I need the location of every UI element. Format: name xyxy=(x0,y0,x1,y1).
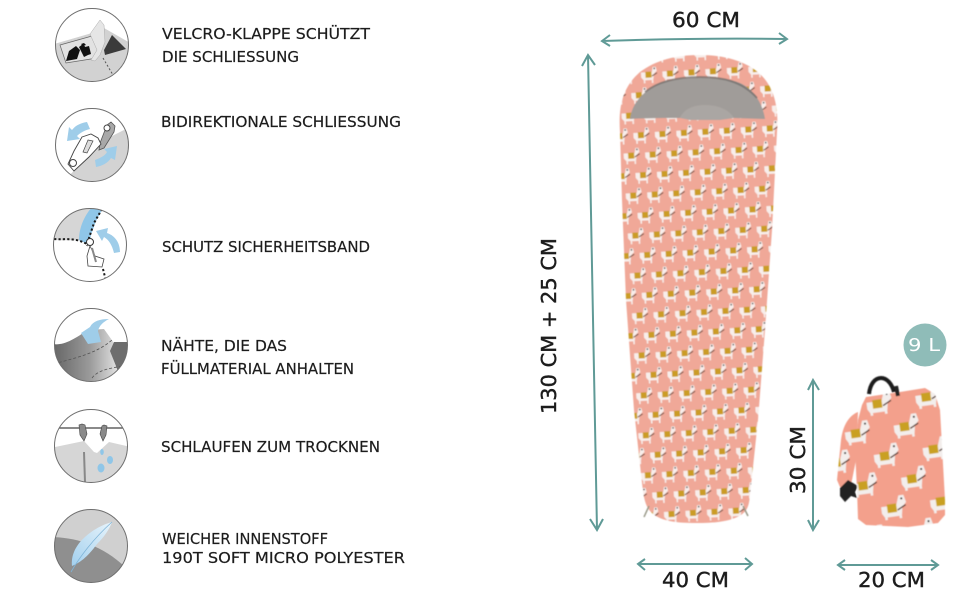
label: 30 cm: 30 CM xyxy=(786,426,810,494)
handle xyxy=(869,378,894,394)
badge: 9 L volume: 9 L xyxy=(908,335,940,356)
icon: seams xyxy=(54,308,128,382)
text: safety band: SCHUTZ SICHERHEITSBAND xyxy=(162,238,370,256)
arrow: backpack height xyxy=(808,380,819,530)
text: seams: FÜLLMATERIAL ANHALTEN xyxy=(161,359,354,378)
arrow: backpack width xyxy=(838,560,938,570)
text: soft inner fabric: 190T SOFT MICRO POLYESTER xyxy=(162,549,405,567)
icon: drying loops xyxy=(54,409,128,483)
text: velcro flap: DIE SCHLIESSUNG xyxy=(162,48,299,66)
sleeping bag xyxy=(620,55,777,523)
text: velcro flap xyxy=(162,24,371,66)
hood opening xyxy=(630,77,765,119)
label: 130 cm + 25 cm: 130 CM + 25 CM xyxy=(537,238,561,414)
hood shadow edge xyxy=(645,77,757,98)
icon: velcro flap xyxy=(55,8,129,82)
strap buckles xyxy=(840,480,858,502)
bag body xyxy=(855,388,945,527)
icon: safety band zipper xyxy=(53,208,127,282)
label: 60 cm: 60 CM xyxy=(672,8,740,32)
icon: bidirectional zipper xyxy=(55,108,129,182)
label: 40 cm: 40 CM xyxy=(662,568,729,592)
shoulder strap xyxy=(837,412,858,490)
arrow: foot width xyxy=(638,558,752,570)
text: velcro flap: VELCRO-KLAPPE SCHÜTZT xyxy=(162,24,371,43)
arrow: top width xyxy=(602,33,787,46)
drawstring xyxy=(896,386,898,396)
text: seams xyxy=(161,336,354,378)
compressed backpack xyxy=(837,378,945,527)
label: 20 cm: 20 CM xyxy=(858,568,925,592)
text: seams: NÄHTE, DIE DAS xyxy=(161,336,287,355)
text: drying loops: SCHLAUFEN ZUM TROCKNEN xyxy=(161,438,380,456)
text: soft inner fabric: WEICHER INNENSTOFF xyxy=(162,530,328,548)
arrow: length xyxy=(582,55,603,530)
bottom corner loops xyxy=(644,506,748,517)
badge: 9 L volume xyxy=(904,324,946,366)
text: soft inner fabric xyxy=(162,530,405,567)
pillow xyxy=(680,105,734,120)
text: bidirectional closure: BIDIREKTIONALE SCHLIESSUNG xyxy=(161,113,401,131)
icon: soft feather xyxy=(54,509,128,583)
